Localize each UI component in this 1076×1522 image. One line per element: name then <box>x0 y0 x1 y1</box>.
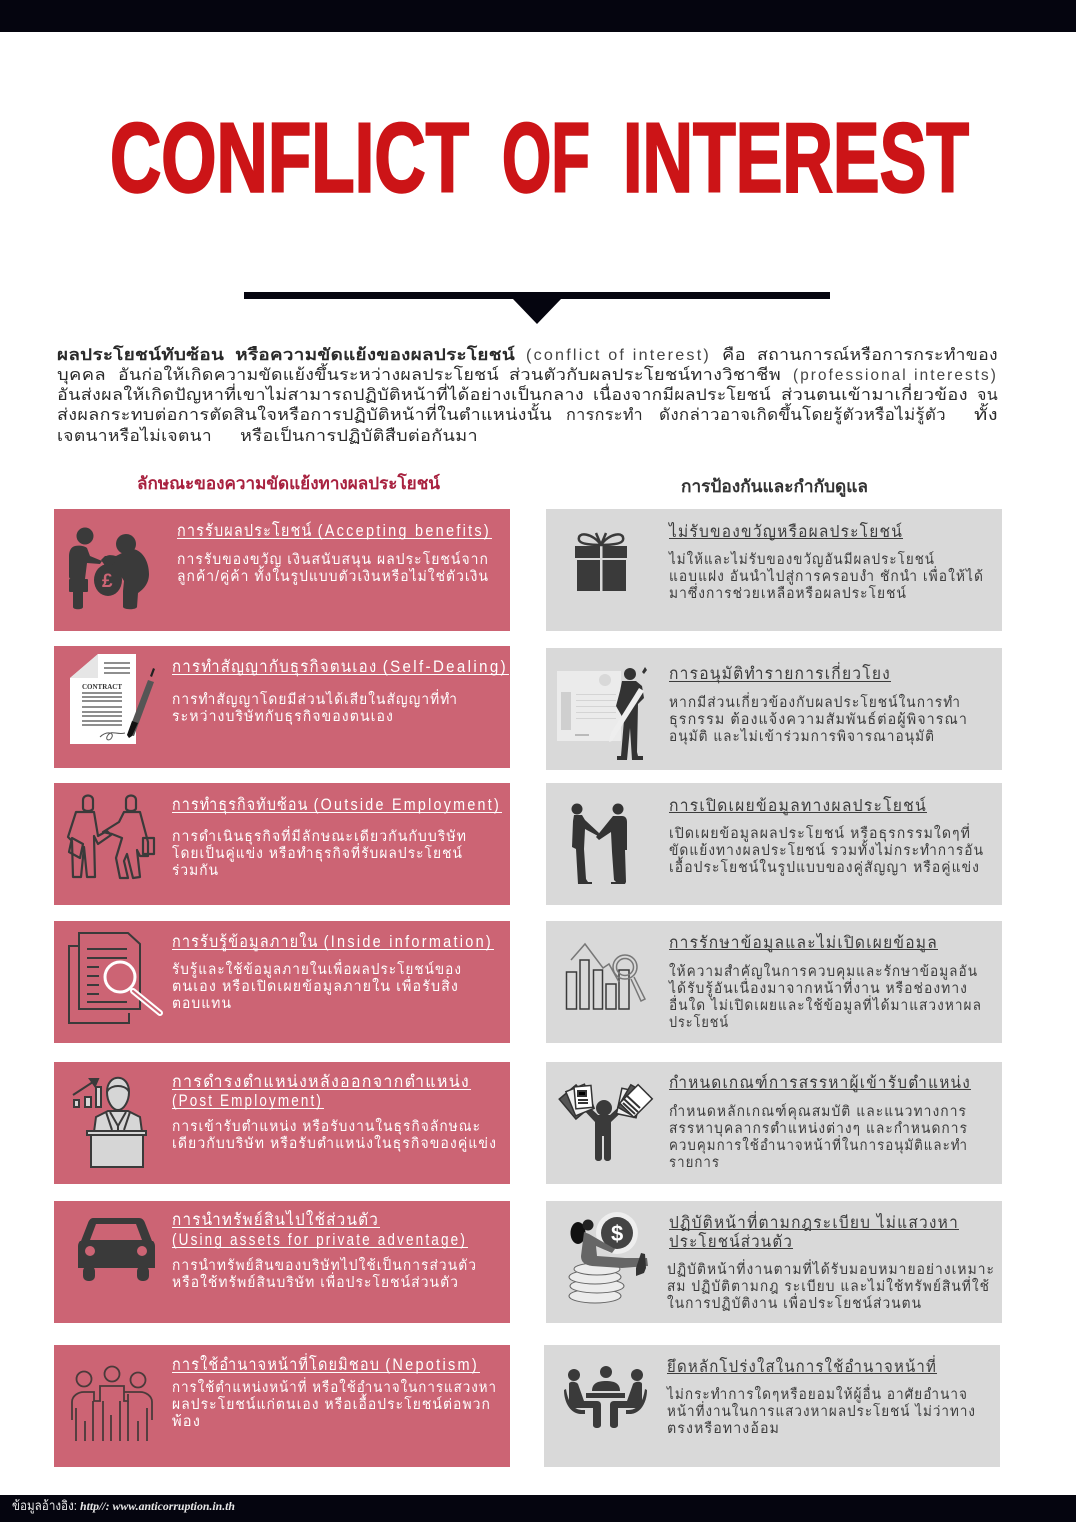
panel: inside information <box>54 921 510 1043</box>
title: CONFLICT <box>110 102 469 212</box>
panel: post employment <box>54 1062 510 1184</box>
icon: meeting around a table <box>564 1366 647 1428</box>
panel: follow rules: สม ปฏิบัติตามกฎ ระเบียบ และไม่ใช้ทรัพย์สินที่ใช้ <box>667 1276 990 1295</box>
panel: recruitment criteria: ควบคุมการใช้อำนาจหน้าที่ในการอนุมัติและทำ <box>669 1135 968 1154</box>
intro paragraph: อันก่อให้เกิดความขัดแย้งขึ้นระหว่างผลประโยชน์ <box>118 363 499 384</box>
panel: nepotism: การใช้อำนาจหน้าที่โดยมิชอบ (Nepotism) <box>172 1353 479 1374</box>
icon: two outlined businessmen <box>68 796 154 878</box>
panel: follow rules: ปฏิบัติหน้าที่ตามกฎระเบียบ ไม่แสวงหา <box>669 1211 959 1232</box>
panel: confidentiality: การรักษาข้อมูลและไม่เปิดเผยข้อมูล <box>669 933 938 953</box>
intro paragraph: อันส่งผลให้เกิดปัญหาที่เขาไม่สามารถปฏิบัติหน้าที่ได้อย่างเป็นกลาง <box>57 383 584 404</box>
title <box>110 102 969 212</box>
intro paragraph: สถานการณ์หรือการกระทำของ <box>757 345 998 364</box>
panel: accepting benefits: การรับผลประโยชน์ (Accepting benefits) <box>177 521 491 540</box>
panel: private use of assets: หรือใช้ทรัพย์สินบริษัท เพื่อประโยชน์ส่วนตัว <box>172 1272 459 1291</box>
heading: prevention: การป้องกันและกำกับดูแล <box>681 477 868 498</box>
panel: confidentiality <box>546 921 1002 1043</box>
panel: private use of assets <box>54 1201 510 1323</box>
icon: two men exchanging money bag: £ <box>102 571 113 592</box>
icon: woman on coin stack: $ <box>611 1221 623 1246</box>
panel: private use of assets: การนำทรัพย์สินของบริษัทไปใช้เป็นการส่วนตัว <box>172 1255 477 1274</box>
panel: post employment: เดียวกับบริษัท หรือรับตำแหน่งในธุรกิจของคู่แข่ง <box>172 1134 497 1152</box>
panel: no gifts: ไม่รับของขวัญหรือผลประโยชน์ <box>667 522 903 541</box>
panel: self-dealing: การทำสัญญากับธุรกิจตนเอง (Self-Dealing) <box>172 658 508 677</box>
panel: disclosure: เอื้อประโยชน์ในรูปแบบของคู่สัญญา หรือคู่แข่ง <box>669 856 980 876</box>
source note: ข้อมูลอ้างอิง: <box>12 1498 77 1514</box>
panel: transparency: ยึดหลักโปร่งใสในการใช้อำนาจหน้าที่ <box>667 1355 937 1376</box>
panel: confidentiality: ประโยชน์ <box>669 1013 729 1031</box>
panel: confidentiality: ได้รับรู้อันเนื่องมาจากหน้าที่งาน หรือช่องทาง <box>668 978 968 997</box>
icon: man with giant pen and letter <box>557 667 647 760</box>
panel: recruitment criteria: กำหนดเกณฑ์การสรรหาผู้เข้ารับตำแหน่ง <box>669 1073 971 1093</box>
intro paragraph: การกระทำ <box>566 407 643 424</box>
panel: transparency: ตรงหรือทางอ้อม <box>667 1420 780 1437</box>
intro paragraph: เนื่องจากมีผลประโยชน์ <box>593 383 771 404</box>
divider with pointer <box>244 292 830 324</box>
intro paragraph <box>57 344 998 445</box>
intro paragraph: ส่วนตัวกับผลประโยชน์ทางวิชาชีพ <box>509 365 781 384</box>
intro paragraph: หรือเป็นการปฏิบัติสืบต่อกันมา <box>240 425 478 445</box>
panel: transparency: ไม่กระทำการใดๆหรือยอมให้ผู้อื่น อาศัยอำนาจ <box>666 1384 968 1403</box>
panel: inside information: การรับรู้ข้อมูลภายใน (Inside information) <box>172 932 493 952</box>
panel: post employment: (Post Employment) <box>172 1092 323 1110</box>
panel: no gifts: ไม่ให้และไม่รับของขวัญอันมีผลประโยชน์ <box>668 550 935 568</box>
intro paragraph: เจตนาหรือไม่เจตนา <box>57 426 212 445</box>
panel: nepotism: ผลประโยชน์แก่ตนเอง หรือเอื้อประโยชน์ต่อพวก <box>172 1393 491 1413</box>
panel: transparency <box>544 1345 1000 1467</box>
panel: no gifts: มาซึ่งการช่วยเหลือหรือผลประโยชน์ <box>669 583 907 602</box>
icon: contract and pen: CONTRACT <box>82 683 122 691</box>
panel: recruitment criteria: รายการ <box>669 1155 720 1171</box>
icon: car <box>78 1218 155 1281</box>
panel: outside employment: การดำเนินธุรกิจที่มีลักษณะเดียวกันกับบริษัท <box>172 826 467 845</box>
icon: woman on coin stack <box>569 1212 648 1303</box>
icon: man holding documents <box>559 1084 652 1161</box>
intro paragraph: ส่งผลกระทบต่อการตัดสินใจหรือการปฏิบัติหน้าที่ในตำแหน่งนั้น <box>57 403 552 424</box>
intro paragraph: ผลประโยชน์ทับซ้อน หรือความขัดแย้งของผลประโยชน์ <box>57 344 515 364</box>
icon: man at podium with rising bars <box>73 1078 146 1167</box>
panel: inside information: รับรู้และใช้ข้อมูลภายในเพื่อผลประโยชน์ของ <box>172 959 462 978</box>
panel: self-dealing: การทำสัญญาโดยมีส่วนได้เสียในสัญญาที่ทำ <box>172 689 458 708</box>
panel: private use of assets: การนำทรัพย์สินไปใช้ส่วนตัว <box>172 1210 379 1229</box>
title: OF <box>502 102 590 212</box>
panel: accepting benefits: การรับของขวัญ เงินสนับสนุน ผลประโยชน์จาก <box>177 550 489 568</box>
panel: no gifts <box>546 509 1002 631</box>
panel: disclosure <box>546 783 1002 905</box>
panel: post employment: การดำรงตำแหน่งหลังออกจากตำแหน่ง <box>172 1073 470 1091</box>
panel: related transactions: อนุมัติ และไม่เข้าร่วมการพิจารณาอนุมัติ <box>669 727 935 745</box>
icon: handshake silhouettes <box>572 804 627 884</box>
panel: related transactions <box>546 648 1002 770</box>
panel: outside employment: ร่วมกัน <box>172 863 219 879</box>
panel: recruitment criteria <box>546 1062 1002 1184</box>
intro paragraph: ดังกล่าวอาจเกิดขึ้นโดยรู้ตัวหรือไม่รู้ตัว <box>659 403 946 425</box>
panel: related transactions: การอนุมัติทำรายการเกี่ยวโยง <box>669 662 891 684</box>
panel: follow rules: ในการปฏิบัติงาน เพื่อประโยชน์ส่วนตน <box>667 1293 922 1312</box>
panel: related transactions: หากมีส่วนเกี่ยวข้องกับผลประโยชน์ในการทำ <box>669 692 961 711</box>
panel: recruitment criteria: สรรหาบุคลากรตำแหน่งต่างๆ และกำหนดการ <box>669 1121 968 1137</box>
panel: accepting benefits: ลูกค้า/คู่ค้า ทั้งในรูปแบบตัวเงินหรือไม่ใช่ตัวเงิน <box>177 565 489 585</box>
footer bar <box>0 1495 1076 1522</box>
panel: nepotism: พ้อง <box>172 1413 201 1430</box>
intro paragraph: ส่วนตนเข้ามาเกี่ยวข้อง <box>781 383 968 404</box>
panel: private use of assets: (Using assets for private adventage) <box>172 1231 467 1249</box>
source note: http//: www.anticorruption.in.th <box>80 1501 235 1513</box>
panel: disclosure: ขัดแย้งทางผลประโยชน์ รวมทั้งไม่กระทำการอัน <box>669 839 984 859</box>
intro paragraph: ทั้ง <box>974 403 998 424</box>
intro paragraph: (conflict of interest) <box>526 347 711 364</box>
source note <box>12 1498 235 1514</box>
heading: characteristics: ลักษณะของความขัดแย้งทางผลประโยชน์ <box>137 473 440 493</box>
panel: follow rules: ประโยชน์ส่วนตัว <box>669 1232 793 1251</box>
panel: transparency: หน้าที่งานในการแสวงหาผลประโยชน์ ไม่ว่าทาง <box>667 1401 976 1420</box>
icon: contract and pen <box>70 654 155 744</box>
icon: three people outline <box>72 1366 152 1441</box>
intro paragraph: (professional interests) <box>793 367 998 384</box>
panel: follow rules <box>546 1201 1002 1323</box>
panel: inside information: ตนเอง หรือเปิดเผยข้อมูลภายใน เพื่อรับสิ่ง <box>172 976 459 995</box>
intro paragraph: บุคคล <box>57 367 106 385</box>
panel: disclosure: การเปิดเผยข้อมูลทางผลประโยชน์ <box>669 796 927 816</box>
icon: bar chart and magnifier <box>566 944 645 1009</box>
intro paragraph: จน <box>977 387 998 404</box>
panel: outside employment: โดยเป็นคู่แข่ง หรือทำธุรกิจที่รับผลประโยชน์ <box>172 843 463 862</box>
panel: accepting benefits <box>54 509 510 631</box>
icon: documents and magnifier <box>69 933 160 1023</box>
panel: inside information: ตอบแทน <box>172 996 232 1012</box>
icon: gift box <box>575 533 627 591</box>
panel: outside employment: การทำธุรกิจทับซ้อน (Outside Employment) <box>172 796 501 815</box>
panel: no gifts: แอบแฝง อันนำไปสู่การครอบงำ ชักนำ เพื่อให้ได้ <box>669 566 984 585</box>
panel: disclosure: เปิดเผยข้อมูลผลประโยชน์ หรือธุรกรรมใดๆที่ <box>669 823 971 842</box>
top bar <box>0 0 1076 32</box>
intro paragraph: คือ <box>722 346 746 364</box>
panel: nepotism: การใช้ตำแหน่งหน้าที่ หรือใช้อำนาจในการแสวงหา <box>172 1377 497 1396</box>
panel: follow rules: ปฏิบัติหน้าที่งานตามที่ได้รับมอบหมายอย่างเหมาะ <box>667 1259 995 1278</box>
panel: self-dealing: ระหว่างบริษัทกับธุรกิจของตนเอง <box>172 709 394 725</box>
panel: nepotism <box>54 1345 510 1467</box>
panel: confidentiality: ให้ความสำคัญในการควบคุมและรักษาข้อมูลอัน <box>669 962 978 980</box>
panel: confidentiality: อื่นใด ไม่เปิดเผยและใช้ข้อมูลที่ได้มาแสวงหาผล <box>669 995 982 1014</box>
panel: post employment: การเข้ารับตำแหน่ง หรือรับงานในธุรกิจลักษณะ <box>172 1117 481 1135</box>
panel: related transactions: ธุรกรรม ต้องแจ้งความสัมพันธ์ต่อผู้พิจารณา <box>669 711 968 728</box>
panel: self-dealing <box>54 646 510 768</box>
panel: recruitment criteria: กำหนดหลักเกณฑ์คุณสมบัติ และแนวทางการ <box>669 1103 967 1120</box>
panel: outside employment <box>54 783 510 905</box>
icon: two men exchanging money bag <box>69 528 149 609</box>
